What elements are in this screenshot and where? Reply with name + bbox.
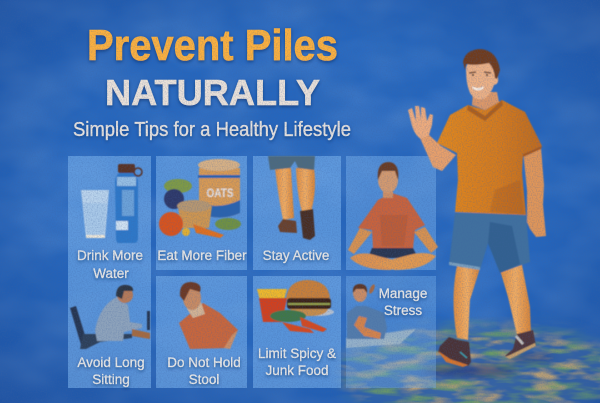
icon: burger, fries and peppers bbox=[257, 280, 334, 333]
icon: waving hand bbox=[408, 106, 433, 139]
label: eat more fiber: Eat More Fiber bbox=[157, 248, 247, 263]
icon: oats jar: OATS bbox=[206, 186, 234, 200]
panel: limit spicy and junk food bbox=[253, 276, 341, 388]
heading: Prevent Piles: Prevent Piles bbox=[87, 21, 338, 70]
neck and head bbox=[463, 49, 500, 110]
arms bbox=[420, 134, 546, 237]
panel: manage stress: Stress bbox=[384, 303, 422, 318]
panel: stay active bbox=[253, 156, 341, 270]
icon: man leaning forward bbox=[179, 282, 238, 349]
label: do not hold stool: Do Not Hold bbox=[167, 355, 241, 370]
label: stay active: Stay Active bbox=[263, 248, 329, 263]
icon: man with hand on chest bbox=[346, 284, 416, 348]
ground patch bbox=[337, 318, 600, 403]
subtitle: Simple Tips for a Healthy Lifestyle bbox=[73, 119, 351, 141]
legs bbox=[454, 265, 531, 340]
shorts bbox=[449, 213, 530, 273]
shoes bbox=[438, 330, 536, 367]
panel: drink more water / avoid long sitting column bbox=[68, 156, 151, 388]
illustration: walking man bbox=[408, 49, 546, 367]
label: drink more water: Drink More bbox=[77, 248, 143, 263]
panel: meditation bbox=[346, 156, 438, 270]
panel: do not hold stool bbox=[156, 276, 247, 388]
icon: fruit and vegetables bbox=[159, 179, 241, 238]
panel: eat more fiber bbox=[156, 156, 247, 270]
panel: limit spicy and junk food: Junk Food bbox=[265, 363, 329, 378]
panel: drink more water / avoid long sitting column: Water bbox=[93, 266, 129, 281]
icon: water bottle bbox=[115, 164, 142, 243]
title bbox=[73, 21, 351, 141]
heading: Naturally: NATURALLY bbox=[105, 72, 320, 113]
icon: man at desk bbox=[70, 285, 150, 349]
icon: man meditating bbox=[348, 162, 438, 270]
label: limit spicy and junk food: Limit Spicy & bbox=[258, 346, 336, 361]
icon: walking legs bbox=[268, 156, 315, 240]
panel: do not hold stool: Stool bbox=[189, 372, 219, 387]
ground shadow bbox=[422, 354, 554, 377]
label: avoid long sitting: Avoid Long bbox=[77, 355, 145, 370]
icon: glass of water bbox=[81, 190, 109, 238]
shirt bbox=[437, 100, 542, 215]
panel: manage stress bbox=[346, 276, 436, 388]
label: manage stress: Manage bbox=[379, 286, 427, 301]
panel: drink more water / avoid long sitting column: Sitting bbox=[92, 372, 130, 387]
